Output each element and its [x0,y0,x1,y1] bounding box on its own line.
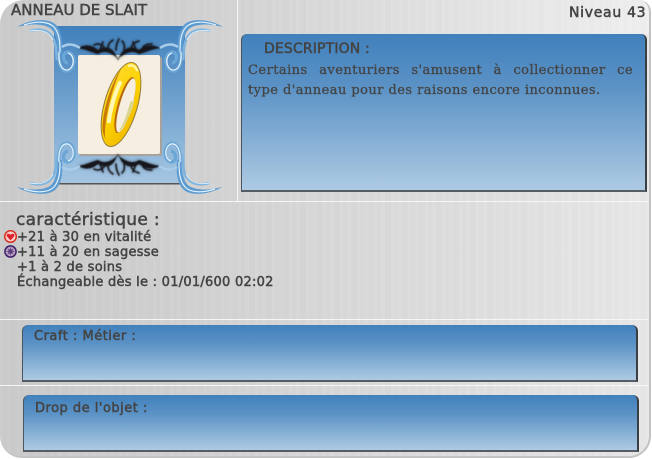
stat: vitality: +21 à 30 en vitalité [17,230,151,245]
drop label: Drop de l'objet : [35,401,148,416]
panel: drop [23,395,639,452]
description text: Certains aventuriers s'amusent à collectionner ce type d'anneau pour des raisons encore inconnues. [248,63,633,98]
ornament: bottom tribal [78,154,160,175]
icon: wisdom [4,245,17,258]
panel: craft [22,325,638,382]
craft label: Craft : Métier : [34,329,136,344]
heading: caractéristique: caractéristique : [16,210,160,230]
stat: exchange date: Échangeable dès le : 01/01/600 02:02 [17,275,274,290]
frame background [54,26,185,184]
stat: heals: +1 à 2 de soins [17,260,122,275]
stats list [4,230,274,290]
icon: vitality heart [4,230,17,243]
description heading: DESCRIPTION : [264,41,370,57]
title: ANNEAU DE SLAIT [11,1,147,19]
ornament: top tribal [78,39,160,60]
ornament: corner swirls [17,20,223,194]
icon: gold ring [93,58,149,151]
panel: description [241,34,647,192]
stat: wisdom: +11 à 20 en sagesse [17,245,159,260]
level label: Niveau 43 [569,5,646,21]
item image frame [17,20,223,194]
parchment [78,55,162,156]
